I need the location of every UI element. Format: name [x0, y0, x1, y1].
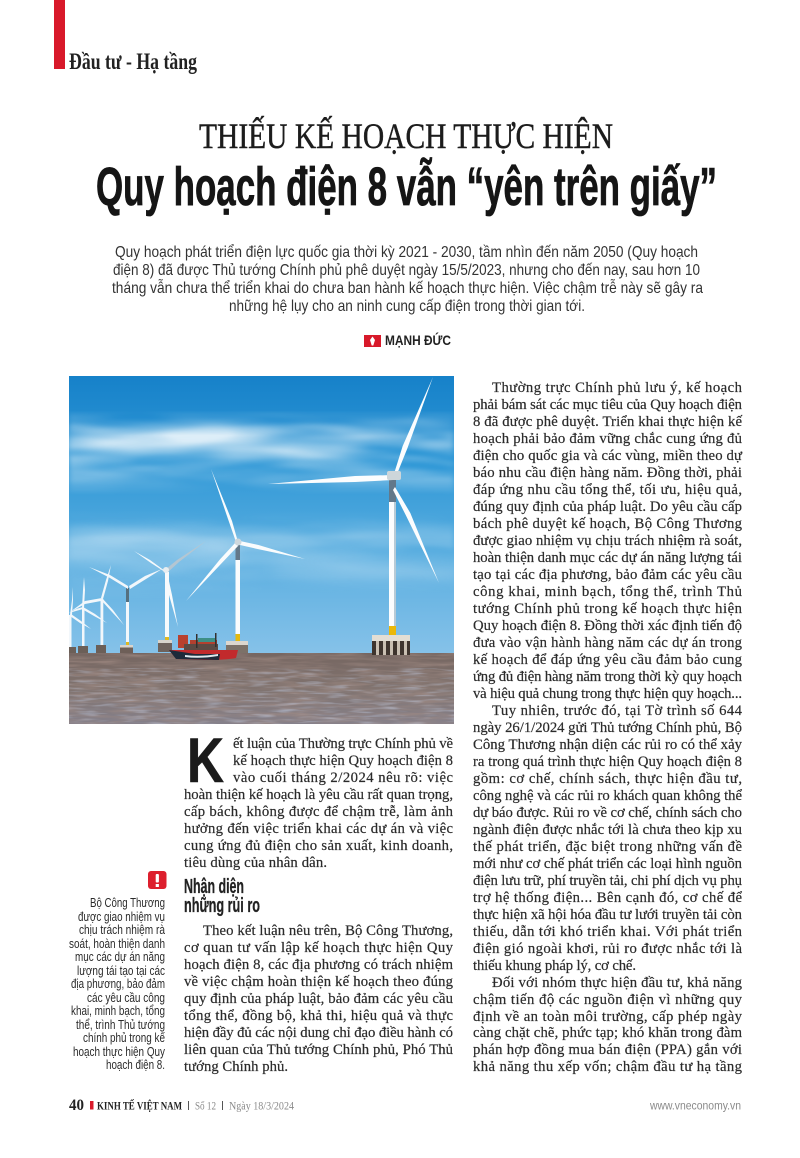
paragraph 2: dự báo được. Rủi ro về cơ chế, chính sách cho	[473, 805, 742, 821]
turbine 5	[70, 565, 124, 653]
callout text: Bộ Công Thương	[90, 895, 165, 910]
issue info	[188, 1098, 294, 1112]
icon: pen	[364, 335, 381, 347]
paragraph 2: ngày 26/1/2024 gửi Thủ tướng Chính phủ, Bộ	[473, 720, 742, 736]
paragraph: risks	[184, 923, 454, 1075]
paragraph 2: Tuy nhiên, trước đó, tại Tờ trình số 644	[492, 703, 743, 719]
paragraph: risks: cơ quan tư vấn lập kế hoạch thực hiện Quy	[184, 940, 454, 956]
paragraph 3	[473, 975, 743, 1075]
paragraph 1: tướng Chính phủ trong kế hoạch thực hiện	[473, 601, 743, 617]
callout text: soát, hoàn thiện danh	[69, 936, 165, 951]
callout text: địa phương, bảo đảm	[71, 976, 165, 991]
intro paragraph: những hệ lụy cho an ninh cung cấp điện trong thời gian tới.	[229, 298, 585, 315]
issue info: Số 12	[195, 1098, 216, 1112]
paragraph 2: thế phát triển, đặc biệt trong những vấn đề	[473, 839, 742, 855]
paragraph: risks: hoạch điện 8, các địa phương có trách nhiệm	[184, 957, 454, 973]
paragraph: risks: Theo kết luận nêu trên, Bộ Công Thương,	[203, 923, 453, 939]
paragraph: risks: về việc chậm hoàn thiện kế hoạch theo đúng	[184, 974, 454, 990]
paragraph 2	[473, 703, 743, 974]
turbine far left	[69, 587, 91, 653]
sky	[69, 376, 454, 654]
paragraph 1: 8 đã được phê duyệt. Triển khai thực hiện kế	[473, 414, 742, 430]
paragraph: risks: hiện đầy đủ các nội dung chỉ đạo điều hành có	[184, 1025, 453, 1041]
paragraph 2: điện lưu trữ, phí truyền tải, chi phí dịch vụ phụ	[473, 873, 743, 889]
paragraph: risks: liên quan của Thủ tướng Chính phủ, Phó Thủ	[184, 1042, 454, 1058]
footer marker	[90, 1101, 94, 1110]
author name: MẠNH ĐỨC	[385, 331, 451, 348]
paragraph 1: và hiệu quả chung trong thực hiện quy hoạch...	[473, 686, 742, 702]
paragraph 3: định về an toàn môi trường, cấp phép ngày	[473, 1009, 743, 1025]
paragraph: lead: cung ứng đủ điện cho sản xuất, kinh doanh,	[184, 838, 453, 854]
turbine 6	[69, 577, 107, 653]
icon: exclamation	[148, 871, 166, 889]
callout text: hoạch điện 8.	[106, 1057, 165, 1072]
paragraph 2: thiếu khung pháp lý, cơ chế.	[473, 958, 636, 974]
subheading: những rủi ro	[184, 895, 260, 917]
intro paragraph: tháng vẫn chưa thể triển khai do chưa ban hành kế hoạch thực hiện. Việc chậm trễ này sẽ gây ra	[112, 278, 703, 297]
paragraph 2: công nghệ và các rủi ro khách quan không thể	[473, 788, 742, 804]
sidebar callout	[69, 871, 166, 1072]
paragraph 1: được giao nhiệm vụ chịu trách nhiệm rà soát,	[473, 533, 742, 549]
paragraph 2: thiếu, dẫn tới khó triển khai. Với phát triển	[473, 924, 743, 940]
issue info: Ngày 18/3/2024	[229, 1098, 294, 1112]
turbine 3	[134, 541, 206, 652]
left column body text	[184, 726, 454, 871]
website: www.vneconomy.vn	[649, 1098, 741, 1112]
paragraph: lead: cấp bách, không được để chậm trễ, làm ảnh	[184, 804, 454, 820]
paragraph: lead: tiêu dùng của nhân dân.	[184, 855, 327, 871]
intro paragraph: điện 8) đã được Thủ tướng Chính phủ phê duyệt ngày 15/5/2023, nhưng cho đến nay, sau hơn 10	[113, 262, 700, 279]
paragraph: risks: tổng thể, đồng bộ, khả thi, hiệu quả và thực	[184, 1008, 453, 1024]
paragraph 1: điện cho quốc gia và các vùng, miền theo dự	[473, 448, 743, 464]
paragraph 3: Đối với nhóm thực hiện đầu tư, khả năng	[492, 975, 743, 991]
callout text: chịu trách nhiệm rà	[79, 922, 166, 937]
paragraph: lead	[184, 736, 454, 871]
paragraph 3: chậm tiến độ các nguồn điện vì những quy	[473, 992, 743, 1008]
paragraph 1: hoạch phải bảo đảm vững chắc cung ứng đủ	[473, 431, 743, 447]
callout text: các yêu cầu công	[87, 990, 165, 1005]
paragraph 1: bách phê duyệt kế hoạch, Bộ Công Thương	[473, 516, 743, 532]
paragraph: risks: tướng Chính phủ.	[184, 1059, 288, 1075]
paragraph 1: báo nhu cầu điện hàng năm. Đồng thời, phải	[473, 465, 742, 481]
paragraph 2: thực hiện xã hội hóa đầu tư lưới truyền tải còn	[473, 907, 743, 923]
title	[96, 116, 717, 217]
turbine 1	[268, 377, 439, 655]
drop cap: K	[187, 726, 224, 796]
callout text: lượng tái tạo tại các	[77, 963, 165, 978]
paragraph 2: trợ hệ thống điện... Bên cạnh đó, cơ chế để	[473, 890, 742, 906]
clouds	[69, 412, 454, 585]
intro paragraph: Quy hoạch phát triển điện lực quốc gia thời kỳ 2021 - 2030, tầm nhìn đến năm 2050 (Quy hoạch	[115, 243, 698, 261]
paragraph: lead: hưởng đến việc triển khai các dự án và việc	[184, 821, 453, 837]
callout text: chính phủ trong kế	[83, 1030, 166, 1045]
photo: offshore wind turbines	[69, 376, 454, 724]
paragraph 2: mới như cơ chế phát triển các loại hình nguồn	[473, 856, 743, 872]
fishing boat	[169, 633, 238, 660]
subheading	[184, 876, 260, 917]
paragraph 1: Thường trực Chính phủ lưu ý, kế hoạch	[492, 380, 743, 396]
paragraph 1: đưa vào vận hành hàng năm các dự án trong	[473, 635, 743, 651]
paragraph 1: công khai, minh bạch, tổng thể, trình Thủ	[473, 584, 743, 600]
footer	[69, 1097, 741, 1114]
paragraph 1: tạo tại các địa phương, bảo đảm các yêu cầu	[473, 567, 743, 583]
page number: 40	[69, 1097, 84, 1114]
paragraph 1: đáp ứng nhu cầu tổng thể, tối ưu, hiệu quả,	[473, 482, 742, 498]
callout text	[69, 895, 166, 1072]
callout text: mục các dự án năng	[75, 949, 165, 964]
subheading: Nhận diện	[184, 876, 244, 898]
intro paragraph	[112, 243, 703, 315]
paragraph 1: hoàn thiện danh mục các dự án năng lượng tái	[473, 550, 742, 566]
paragraph 1: kế hoạch để đáp ứng yêu cầu đảm bảo cung	[473, 652, 743, 668]
paragraph 2: điện gió ngoài khơi, rủi ro được nhắc tới là	[473, 941, 742, 957]
paragraph 3: khả năng thu xếp vốn; chậm đầu tư hạ tầng	[473, 1059, 743, 1075]
paragraph: lead: ết luận của Thường trực Chính phủ về	[233, 736, 453, 752]
paragraph 1: đúng quy định của pháp luật. Do yêu cầu cấp	[473, 499, 742, 515]
callout text: hoạch thực hiện Quy	[73, 1044, 165, 1059]
publication name: KINH TẾ VIỆT NAM	[97, 1098, 182, 1112]
paragraph: lead: kế hoạch thực hiện Quy hoạch điện 8	[233, 753, 453, 769]
sea	[69, 653, 454, 724]
callout text: được giao nhiệm vụ	[78, 909, 165, 924]
paragraph 1: Quy hoạch điện 8. Đồng thời xác định tiến độ	[473, 618, 742, 634]
paragraph 2: gồm: cơ chế, chính sách, thực hiện đầu tư,	[473, 771, 742, 787]
section label: Đầu tư - Hạ tầng	[69, 49, 197, 74]
section marker: red bar	[54, 0, 65, 69]
callout text: thể, trình Thủ tướng	[76, 1017, 165, 1032]
callout text: khai, minh bạch, tổng	[71, 1003, 165, 1018]
author byline	[364, 331, 451, 348]
turbine 2	[186, 469, 305, 653]
paragraph: lead: hoàn thiện kế hoạch là yêu cầu rất quan trọng,	[184, 787, 453, 803]
paragraph 2: ra trong quá trình thực hiện Quy hoạch điện 8	[473, 754, 742, 770]
paragraph 1	[473, 380, 743, 702]
paragraph 2: Công Thương nhận diện các rủi ro có thể xảy	[473, 737, 743, 753]
paragraph 2: ngành điện được nhắc tới là chưa theo kịp xu	[473, 822, 743, 838]
paragraph: risks: quy định của pháp luật, bảo đảm các yêu cầu	[184, 991, 454, 1007]
paragraph 3: càng chặt chẽ, phức tạp; khó khăn trong đàm	[473, 1025, 743, 1041]
paragraph 1: ứng đủ điện hàng năm trong thời kỳ quy hoạch	[473, 669, 743, 685]
paragraph 3: phán hợp đồng mua bán điện (PPA) gắn với	[473, 1042, 742, 1058]
title line 1: THIẾU KẾ HOẠCH THỰC HIỆN	[199, 116, 613, 156]
paragraph: lead: vào cuối tháng 2/2024 nêu rõ: việc	[233, 770, 453, 786]
paragraph 1: phải bám sát các mục tiêu của Quy hoạch điện	[473, 397, 743, 413]
turbine 4	[89, 567, 162, 653]
right column body text	[473, 380, 743, 1075]
